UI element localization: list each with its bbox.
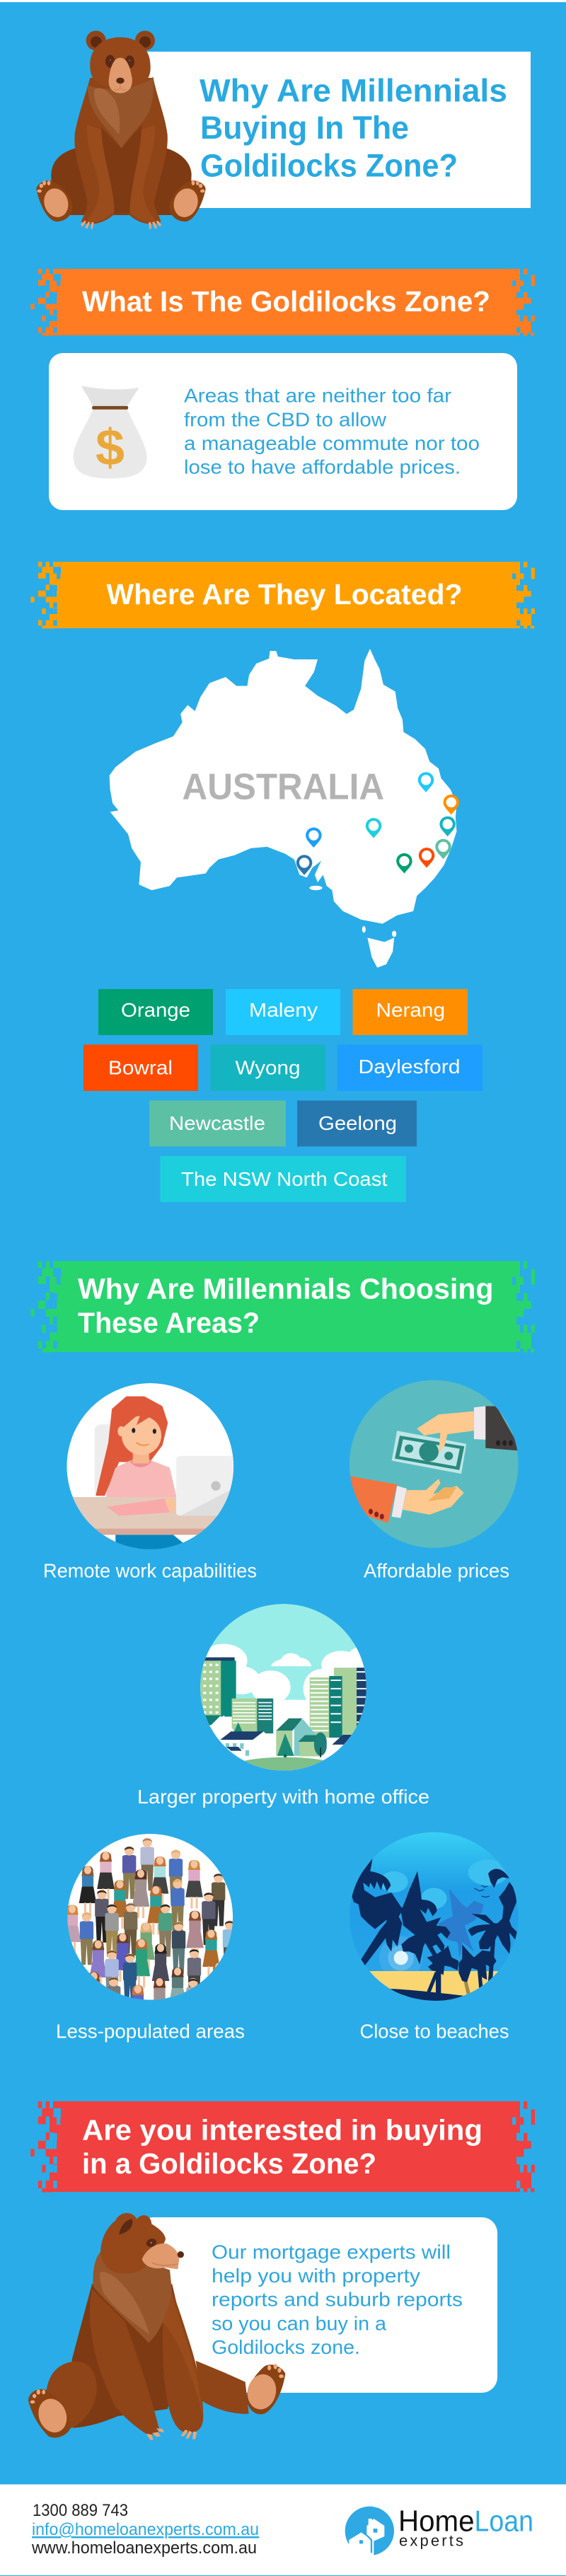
- section banner: where are they located: [30, 562, 535, 628]
- tag: Wyong: [211, 1044, 325, 1091]
- section banner: why millennials choose: [30, 1261, 535, 1352]
- definition text: from the CBD to allow: [184, 409, 387, 430]
- tag: Maleny: [226, 989, 340, 1035]
- definition text: a manageable commute nor too: [184, 432, 480, 454]
- icon: sitting bear: [36, 30, 206, 229]
- heading: Why Are Millennials Choosing: [78, 1272, 494, 1305]
- heading: Are you interested in buying: [82, 2114, 483, 2147]
- map of Australia: [110, 649, 459, 968]
- definition card: $: [96, 420, 125, 476]
- expert message card: [138, 2217, 497, 2393]
- heading: in a Goldilocks Zone?: [82, 2147, 376, 2180]
- section banner: what is the goldilocks zone: [30, 269, 535, 335]
- tag: Maleny: Maleny: [249, 999, 318, 1021]
- pin: Nerang: [444, 795, 459, 814]
- illustration: city and houses: [200, 1604, 366, 1771]
- icon: bear looking right: [28, 2213, 285, 2440]
- tag: Geelong: [297, 1101, 417, 1146]
- pin: Daylesford: [306, 828, 322, 848]
- logo: Home Loan Experts: Loan: [474, 2505, 533, 2537]
- pin: NSW North Coast: [366, 818, 381, 838]
- tag: Nerang: [352, 989, 468, 1035]
- tag: Bowral: [83, 1044, 198, 1091]
- title panel: [145, 52, 531, 208]
- definition card: [49, 353, 517, 510]
- illustration: woman working remotely: [67, 1383, 236, 1552]
- title: Goldilocks Zone?: [200, 147, 458, 184]
- heading: [82, 2114, 483, 2180]
- title: Buying In The: [200, 110, 409, 146]
- reasons row one and two: [67, 1380, 521, 1552]
- contact details: [31, 2501, 259, 2558]
- icon: money bag: [74, 386, 147, 478]
- map label: AUSTRALIA: [183, 767, 384, 808]
- pin: Wyong: [439, 816, 456, 836]
- tag: Daylesford: Daylesford: [358, 1056, 460, 1078]
- pin: Bowral: [419, 848, 434, 868]
- contact details: www.homeloanexperts.com.au: [31, 2539, 257, 2558]
- definition text: lose to have affordable prices.: [184, 456, 461, 478]
- heading: What Is The Goldilocks Zone?: [82, 285, 490, 318]
- tag: Newcastle: Newcastle: [169, 1112, 265, 1134]
- pin: Orange: [396, 853, 412, 873]
- tag: Wyong: Wyong: [235, 1057, 300, 1078]
- contact details: 1300 889 743: [33, 2501, 128, 2520]
- illustration: crowd of people: [67, 1834, 233, 2000]
- location tags: [83, 989, 483, 1202]
- footer: [0, 2485, 566, 2575]
- label: close to beaches: Close to beaches: [359, 2021, 509, 2042]
- heading: Where Are They Located?: [106, 578, 463, 611]
- tag: Bowral: Bowral: [108, 1057, 173, 1078]
- message text: [212, 2241, 463, 2358]
- message text: Goldilocks zone.: [212, 2336, 360, 2358]
- label: larger property: Larger property with home office: [137, 1786, 429, 1808]
- tag: Nerang: Nerang: [376, 999, 445, 1021]
- illustration: palm beach sunset: [350, 1832, 519, 2001]
- definition text: [184, 385, 480, 478]
- message text: Our mortgage experts will: [212, 2241, 451, 2263]
- tag: Geelong: Geelong: [318, 1112, 397, 1134]
- tag: The NSW North Coast: The NSW North Coast: [181, 1168, 388, 1190]
- logo: Home Loan Experts: Home: [398, 2505, 474, 2537]
- section banner: call to action: [30, 2101, 535, 2192]
- tag: Orange: Orange: [121, 999, 190, 1021]
- contact details: info@homeloanexperts.com.au: [32, 2520, 259, 2539]
- title: Why Are Millennials: [200, 72, 507, 109]
- label: less-populated: Less-populated areas: [56, 2021, 245, 2042]
- message text: help you with property: [212, 2265, 420, 2287]
- pin: Maleny: [418, 772, 434, 792]
- tag: Newcastle: [149, 1101, 286, 1146]
- label: remote work: Remote work capabilities: [43, 1559, 257, 1582]
- tag: The NSW North Coast: [160, 1156, 406, 1202]
- title: [200, 72, 507, 184]
- pin: Geelong: [296, 855, 312, 875]
- tag: Orange: [98, 989, 213, 1035]
- definition text: Areas that are neither too far: [184, 385, 451, 406]
- heading: These Areas?: [78, 1306, 260, 1339]
- tag: Daylesford: [337, 1044, 483, 1091]
- illustration: handing over money: [347, 1380, 521, 1548]
- logo: Home Loan Experts: experts: [399, 2531, 463, 2550]
- message text: so you can buy in a: [212, 2312, 386, 2335]
- logo: Home Loan Experts: [342, 2505, 533, 2562]
- heading: [78, 1272, 494, 1339]
- message text: reports and suburb reports: [212, 2288, 463, 2311]
- label: affordable prices: Affordable prices: [364, 1559, 509, 1582]
- pin: Newcastle: [435, 839, 451, 859]
